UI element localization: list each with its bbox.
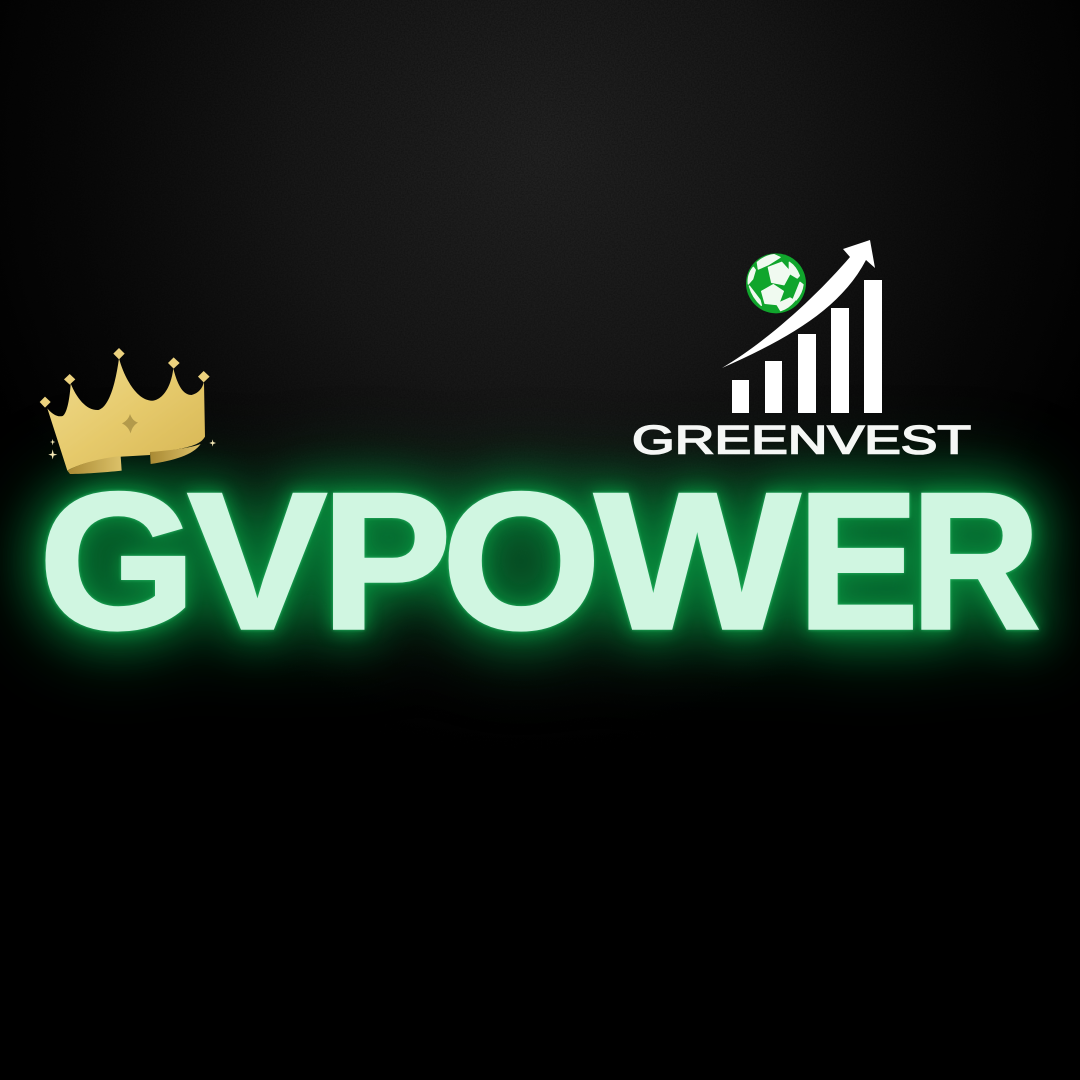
background: dark textured gradient <box>76 0 1005 482</box>
title: GVPOWER: P <box>322 453 451 670</box>
logo wordmark: GREENVEST <box>632 418 971 462</box>
crown centre star <box>122 414 138 433</box>
title: GVPOWER: V <box>188 453 326 670</box>
title: GVPOWER: O <box>442 453 600 670</box>
title: GVPOWER: E <box>798 453 918 670</box>
icon: gold crown <box>40 348 216 474</box>
icon: soccer ball <box>746 253 806 313</box>
crown underside band right <box>150 444 201 464</box>
logo: Greenvest <box>632 240 971 462</box>
crown tip diamonds <box>40 348 210 408</box>
title: GVPOWER: G <box>39 453 196 670</box>
crown body <box>47 358 205 471</box>
crown underside band left <box>67 456 122 474</box>
title: GVPOWER: W <box>595 453 800 670</box>
icon: growth arrow <box>722 240 875 368</box>
title: GVPOWER <box>0 436 1080 688</box>
title: GVPOWER: R <box>911 453 1039 670</box>
sparkles <box>48 439 216 459</box>
icon: rising bar chart <box>732 280 882 413</box>
